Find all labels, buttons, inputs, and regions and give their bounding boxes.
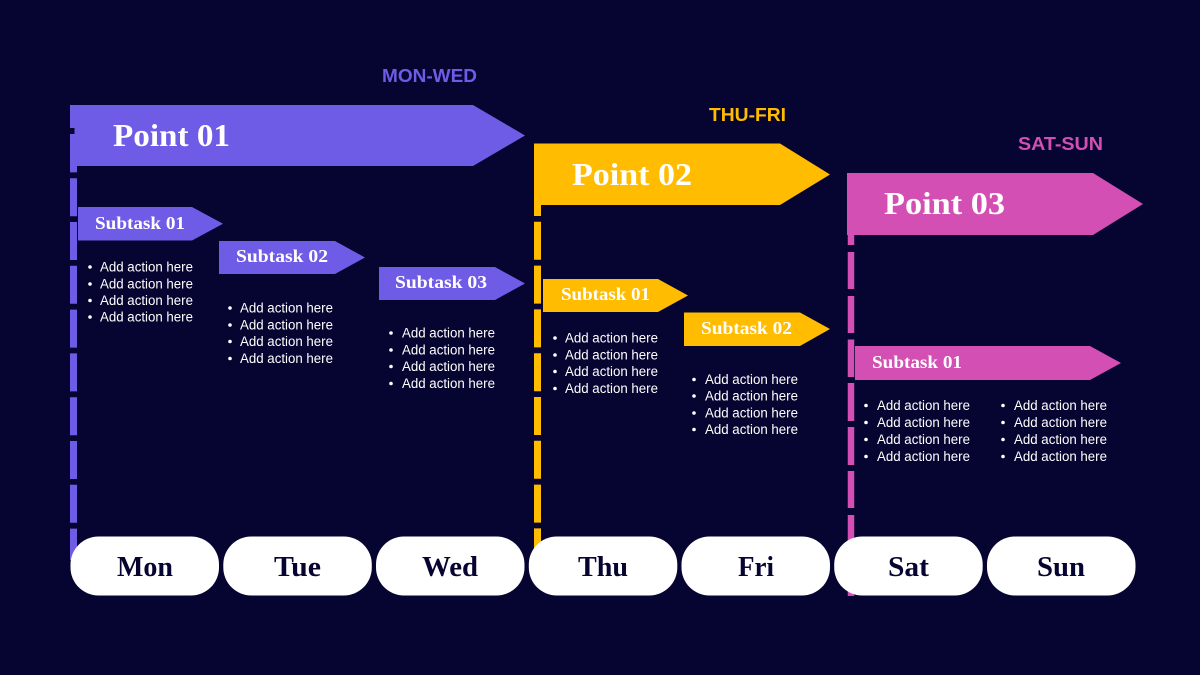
action list: Sat: Add action here: [877, 398, 970, 413]
main arrow: Point 03: [847, 173, 1143, 235]
main arrow: Point 01: [70, 105, 525, 166]
day pill: Sun: [987, 536, 1136, 596]
subtask arrow: Thu Subtask 01: [543, 279, 688, 312]
day pill: Wed: [376, 536, 524, 596]
dashed timeline: Sat-Sun: [848, 208, 854, 596]
action list: Sat: Add action here: [877, 449, 970, 464]
action list: Thu: Add action here: [565, 381, 658, 396]
subtask arrow: Fri Subtask 02: [684, 312, 830, 346]
subtask arrow: Tue Subtask 02: Subtask 02: [236, 246, 328, 266]
day pill: Mon: Mon: [117, 551, 173, 583]
action list: Tue: Add action here: [240, 318, 333, 332]
action list: Fri: Add action here: [705, 388, 798, 404]
dashed timeline: Thu-Fri: [534, 178, 541, 560]
day pill: Tue: Tue: [274, 551, 321, 583]
action list: Fri: Add action here: [705, 406, 798, 420]
day pill: Thu: [529, 536, 677, 596]
action list: Sun: [1001, 398, 1107, 464]
action list: Sun: Add action here: [1014, 449, 1107, 464]
subtask arrow: Thu Subtask 01: Subtask 01: [561, 284, 650, 304]
action list: Fri: Add action here: [705, 422, 798, 437]
action list: Mon: Add action here: [100, 260, 193, 274]
action list: Mon: Add action here: [100, 293, 193, 308]
action list: Tue: Add action here: [240, 300, 333, 316]
subtask arrow: Tue Subtask 02: [219, 241, 365, 274]
day pill: Sun: Sun: [1037, 551, 1085, 583]
action list: Sat: Add action here: [877, 415, 970, 430]
action list: Wed: Add action here: [402, 326, 495, 340]
action list: Tue: Add action here: [240, 351, 333, 366]
subtask arrow: Sat-Sun Subtask 01: [855, 346, 1121, 380]
subtask arrow: Wed Subtask 03: Subtask 03: [395, 272, 487, 292]
subtask arrow: Sat-Sun Subtask 01: Subtask 01: [872, 352, 962, 372]
action list: Wed: Add action here: [402, 376, 495, 391]
action list: Fri: Add action here: [705, 372, 798, 387]
main arrow: Point 02: Point 02: [572, 156, 692, 192]
action list: Wed: Add action here: [402, 342, 495, 358]
day pill: Sat: Sat: [888, 551, 929, 583]
day pill: Mon: [70, 536, 219, 596]
subtask arrow: Mon Subtask 01: Subtask 01: [95, 213, 185, 233]
day pill: Tue: [223, 536, 372, 596]
main arrow: Point 03: Point 03: [884, 185, 1005, 221]
action list: Mon: [88, 260, 193, 324]
action list: Wed: [389, 326, 495, 391]
action list: Sat: [864, 398, 970, 464]
day pill: Sat: [834, 536, 983, 596]
action list: Fri: [692, 372, 798, 437]
action list: Thu: [553, 330, 658, 396]
period label: MON-WED: MON-WED: [382, 66, 477, 86]
subtask arrow: Mon Subtask 01: [78, 207, 223, 240]
day pill: Wed: Wed: [422, 551, 478, 583]
main arrow: Point 02: [534, 144, 830, 205]
action list: Sun: Add action here: [1014, 432, 1107, 447]
action list: Mon: Add action here: [100, 276, 193, 292]
action list: Sun: Add action here: [1014, 398, 1107, 413]
subtask arrow: Fri Subtask 02: Subtask 02: [701, 318, 792, 338]
action list: Sat: Add action here: [877, 432, 970, 447]
day pill: Fri: Fri: [738, 551, 774, 583]
period label: THU-FRI: THU-FRI: [709, 105, 786, 125]
action list: Thu: Add action here: [565, 330, 658, 346]
dashed timeline: Mon-Wed: [70, 134, 77, 560]
action list: Sun: Add action here: [1014, 415, 1107, 430]
day pill: Fri: [682, 536, 830, 596]
main arrow: Point 01: Point 01: [113, 117, 230, 153]
action list: Thu: Add action here: [565, 348, 658, 362]
action list: Wed: Add action here: [402, 359, 495, 374]
action list: Thu: Add action here: [565, 364, 658, 379]
day pill: Thu: Thu: [578, 551, 628, 583]
action list: Tue: Add action here: [240, 334, 333, 349]
period label: SAT-SUN: SAT-SUN: [1018, 134, 1103, 154]
action list: Mon: Add action here: [100, 310, 193, 324]
subtask arrow: Wed Subtask 03: [379, 267, 525, 300]
action list: Tue: [228, 300, 333, 366]
